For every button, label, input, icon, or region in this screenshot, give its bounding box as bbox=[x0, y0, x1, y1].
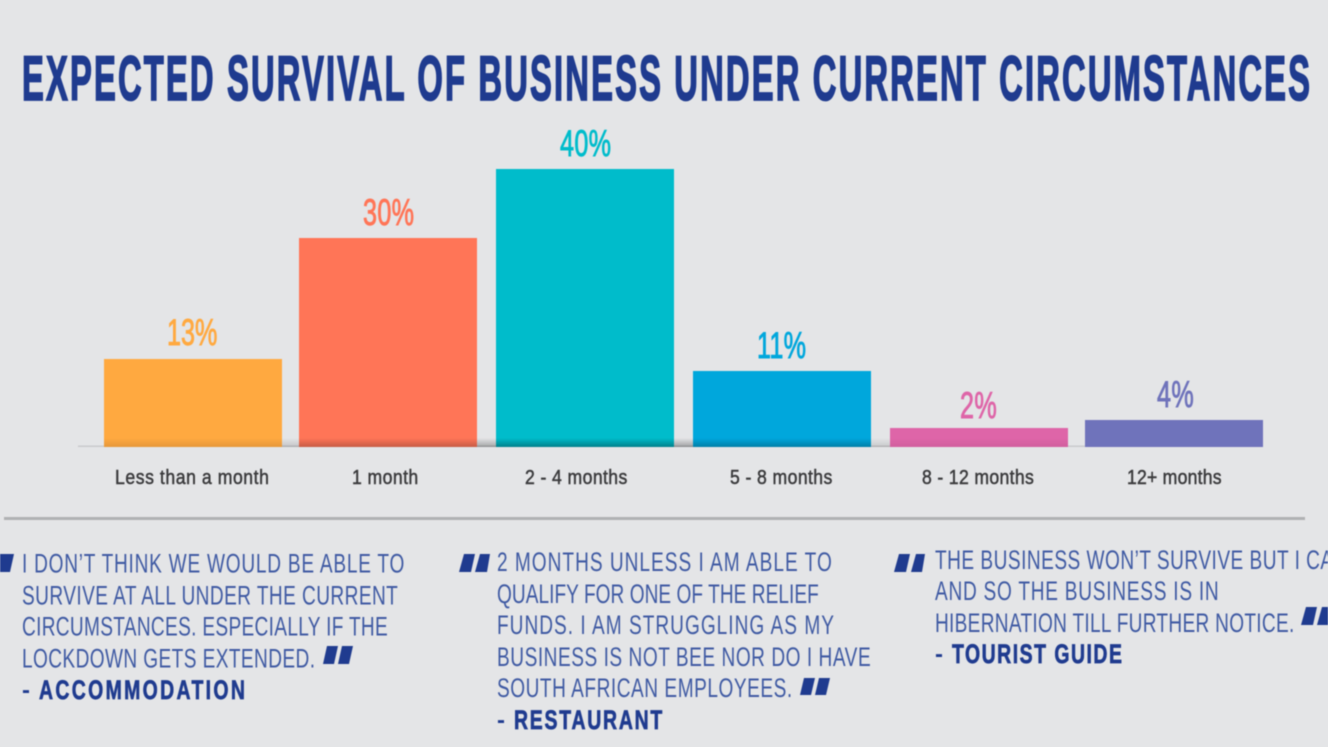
bar: 5 - 8 months: 5 - 8 months bbox=[730, 467, 832, 489]
quote text: BUSINESS IS NOT BEE NOR DO I HAVE bbox=[497, 642, 871, 672]
bar: 2 - 4 months: 40% bbox=[560, 122, 611, 164]
quote text bbox=[497, 547, 871, 703]
icon: closing quote mark bbox=[1301, 607, 1328, 625]
quote text bbox=[22, 548, 404, 673]
bar: less than a month: 13% bbox=[167, 311, 217, 353]
quote text: 2 MONTHS UNLESS I AM ABLE TO bbox=[497, 547, 832, 577]
bar: 8 - 12 months: 2% bbox=[960, 384, 997, 426]
icon: closing quote mark bbox=[800, 678, 830, 695]
attribution: - bbox=[497, 707, 505, 734]
attribution: - bbox=[935, 641, 943, 668]
bar: less than a month bbox=[104, 311, 282, 489]
bar: 12+ months: 4% bbox=[1157, 373, 1194, 415]
bar: 12+ months: 12+ months bbox=[1127, 467, 1222, 489]
bar: 8 - 12 months: 8 - 12 months bbox=[922, 467, 1034, 489]
bar: 1 month bbox=[299, 191, 477, 489]
icon: closing quote mark bbox=[323, 646, 353, 664]
attribution: RESTAURANT bbox=[514, 705, 663, 735]
bar: 12+ months bbox=[1085, 373, 1263, 489]
quote text: SURVIVE AT ALL UNDER THE CURRENT bbox=[22, 580, 398, 610]
bar: 8 - 12 months bbox=[890, 384, 1068, 489]
quote text: HIBERNATION TILL FURTHER NOTICE. bbox=[935, 608, 1294, 638]
attribution: - bbox=[22, 677, 30, 704]
quote text: I DON’T THINK WE WOULD BE ABLE TO bbox=[22, 548, 404, 578]
icon: opening quote mark bbox=[0, 554, 14, 572]
quote text: LOCKDOWN GETS EXTENDED. bbox=[22, 643, 315, 673]
quote text: THE BUSINESS WON’T SURVIVE BUT I CA bbox=[935, 545, 1328, 575]
bar chart bbox=[78, 122, 1263, 489]
bar: 5 - 8 months bbox=[693, 324, 871, 489]
bar: 2 - 4 months bbox=[496, 122, 674, 489]
icon: opening quote mark bbox=[894, 554, 925, 572]
bar: less than a month: Less than a month bbox=[115, 467, 269, 489]
quote text: FUNDS. I AM STRUGGLING AS MY bbox=[497, 610, 834, 640]
title: EXPECTED SURVIVAL OF BUSINESS UNDER CURRENT CIRCUMSTANCES bbox=[22, 44, 1310, 114]
quote: restaurant bbox=[459, 547, 871, 735]
icon: opening quote mark bbox=[459, 554, 490, 572]
quote: tourist guide bbox=[894, 545, 1328, 669]
bar: 1 month: 30% bbox=[363, 191, 414, 233]
bar: 1 month: 1 month bbox=[352, 467, 418, 489]
quote text: QUALIFY FOR ONE OF THE RELIEF bbox=[497, 579, 819, 609]
attribution: TOURIST GUIDE bbox=[952, 639, 1122, 669]
bar: 2 - 4 months: 2 - 4 months bbox=[525, 467, 627, 489]
quote text: CIRCUMSTANCES. ESPECIALLY IF THE bbox=[22, 611, 388, 641]
quote: accommodation bbox=[0, 548, 404, 705]
quote text: AND SO THE BUSINESS IS IN bbox=[935, 576, 1219, 606]
quote text: SOUTH AFRICAN EMPLOYEES. bbox=[497, 673, 792, 703]
attribution: ACCOMMODATION bbox=[39, 675, 245, 705]
bar: 5 - 8 months: 11% bbox=[757, 324, 806, 366]
quote text bbox=[935, 545, 1328, 638]
